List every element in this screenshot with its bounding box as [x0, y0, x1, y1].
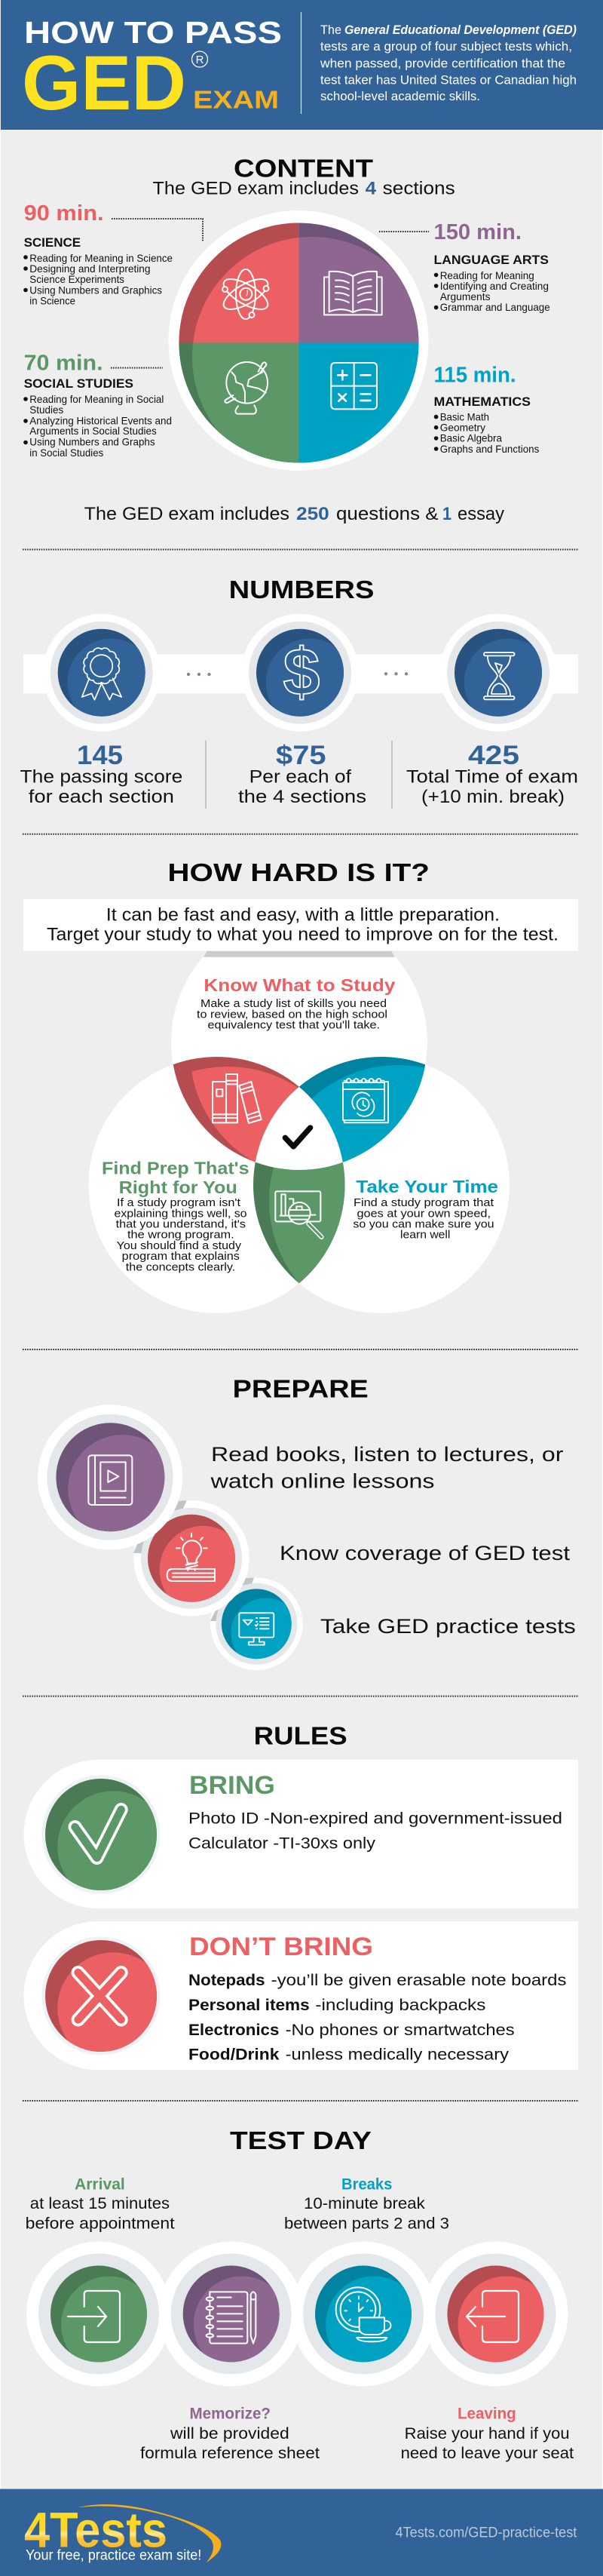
- panel: language arts: Grammar and Language: [440, 301, 550, 313]
- title: GED: [22, 40, 186, 126]
- panel: social studies: Using Numbers and Graphs: [29, 435, 155, 447]
- panel: mathematics: Graphs and Functions: [440, 443, 539, 455]
- text: find prep: explaining things well, so: [115, 1207, 247, 1220]
- stat: fee per section: $75: [276, 741, 326, 770]
- step: practice tests icon: [210, 1578, 303, 1670]
- heading: how hard is it: HOW HARD IS IT?: [167, 858, 430, 886]
- heading: content: CONTENT: [234, 154, 373, 183]
- panel: don't bring: -you’ll be given erasable note boards: [271, 1972, 567, 1989]
- text: find prep: If a study program isn't: [117, 1196, 241, 1209]
- icon: check mark: [285, 1128, 311, 1147]
- icon: chart with magnifier: [275, 1191, 322, 1237]
- text: take your time: goes at your own speed,: [357, 1207, 491, 1220]
- text: coverage: Know coverage of GED test: [280, 1542, 571, 1564]
- step: read books icon: [38, 1405, 182, 1549]
- panel: don't bring: -unless medically necessary: [286, 2046, 510, 2064]
- panel: bring: [23, 1760, 578, 1908]
- logo: 4Tests: Your free, practice exam site!: [26, 2547, 201, 2563]
- icon: dollar sign: [249, 622, 354, 726]
- text: find prep: that you understand, it's: [116, 1218, 246, 1231]
- stat: passing score: [20, 741, 182, 807]
- text: questions and essay: questions &: [336, 504, 439, 524]
- panel: don't bring: [23, 1921, 578, 2070]
- text: arrival: at least 15 minutes: [30, 2195, 170, 2212]
- panel: social studies: Analyzing Historical Events and: [29, 414, 172, 426]
- icon: open book: [324, 272, 382, 315]
- panel: language arts: 150 min.: [434, 220, 522, 244]
- text: memorize: Memorize?: [190, 2405, 271, 2423]
- subheading: 4 sections: The GED exam includes: [152, 178, 359, 199]
- text: memorize: formula reference sheet: [140, 2445, 320, 2462]
- icon: exit door: [435, 2254, 556, 2375]
- text: arrival: [26, 2175, 175, 2233]
- panel: bring: Photo ID -Non-expired and government-issued: [188, 1810, 562, 1827]
- stat: passing score: 145: [77, 741, 123, 770]
- stat: total time: (+10 min. break): [421, 787, 565, 807]
- icon: books: [213, 1074, 262, 1123]
- panel: science: Designing and Interpreting: [29, 263, 150, 275]
- panel: social studies: Reading for Meaning in Social: [29, 393, 164, 405]
- panel: social studies: 70 min.: [24, 352, 103, 376]
- logo: 4Tests: 4Tests: [24, 2501, 167, 2557]
- teal overlap: [286, 1057, 425, 1162]
- text: questions and essay: The GED exam includes: [84, 504, 289, 524]
- title: EXAM: [193, 86, 279, 113]
- panel: science: 90 min.: [24, 201, 104, 226]
- intro paragraph: The: [320, 23, 341, 37]
- panel: science: Science Experiments: [29, 273, 124, 285]
- text: arrival: Arrival: [75, 2175, 125, 2193]
- icon: calendar clock: [343, 1079, 388, 1122]
- venn diagram: [89, 956, 510, 1313]
- text: questions and essay: essay: [458, 504, 504, 524]
- red overlap: [173, 1057, 299, 1162]
- text: read books: watch online lessons: [210, 1470, 434, 1493]
- callout: intro band: It can be fast and easy, with a little preparation.: [106, 905, 500, 925]
- text: memorize: [140, 2405, 320, 2462]
- text: leaving: Raise your hand if you: [405, 2425, 570, 2442]
- text: leaving: need to leave your seat: [401, 2445, 574, 2462]
- subheading: 4 sections: sections: [383, 178, 455, 199]
- panel: science: SCIENCE: [24, 235, 81, 250]
- text: find prep: the wrong program.: [127, 1228, 234, 1242]
- panel: mathematics: 115 min.: [434, 364, 516, 388]
- panel: mathematics: Geometry: [440, 421, 485, 433]
- stat: fee per section: [238, 741, 366, 807]
- panel: language arts: [379, 220, 550, 313]
- panel: don't bring: Food/Drink: [188, 2046, 280, 2064]
- text: know what to study: to review, based on the high school: [197, 1008, 387, 1021]
- panel: language arts: Identifying and Creating: [440, 280, 549, 292]
- panel: don't bring: Electronics: [188, 2022, 279, 2039]
- panel: mathematics: Basic Algebra: [440, 431, 502, 444]
- pie chart: four sections: [169, 210, 428, 471]
- test day icons row: [26, 2242, 568, 2387]
- stat: fee per section: the 4 sections: [238, 787, 366, 807]
- panel: science: Reading for Meaning in Science: [29, 252, 173, 264]
- panel: language arts: Reading for Meaning: [440, 269, 534, 281]
- icon: award ribbon: [51, 622, 155, 726]
- title: HOW TO PASS: [24, 15, 282, 50]
- text: breaks: 10-minute break: [304, 2195, 425, 2212]
- text: read books: Read books, listen to lectures, or: [211, 1443, 563, 1466]
- panel: don't bring: Notepads: [188, 1972, 265, 1989]
- panel: don't bring: Personal items: [188, 1997, 310, 2014]
- title: R: [196, 54, 204, 66]
- callout: intro band: [23, 899, 578, 957]
- panel: social studies: Arguments in Social Studies: [29, 425, 157, 437]
- intro paragraph: General Educational Development (GED): [344, 23, 577, 37]
- icon: x mark: [41, 1936, 169, 2064]
- intro paragraph: school-level academic skills.: [320, 89, 480, 103]
- panel: social studies: Studies: [29, 404, 63, 416]
- text: leaving: Leaving: [458, 2405, 516, 2423]
- icon: atom: [219, 269, 272, 319]
- panel: social studies: [23, 352, 172, 459]
- panel: mathematics: Basic Math: [440, 410, 489, 422]
- header banner: [1, 0, 603, 130]
- text: find prep: program that explains: [122, 1250, 240, 1263]
- panel: bring: Calculator -TI-30xs only: [188, 1835, 376, 1853]
- text: find prep: You should find a study: [117, 1239, 242, 1252]
- icon: dollar sign: $: [283, 634, 320, 709]
- intro paragraph: when passed, provide certification that the: [320, 56, 565, 71]
- icon: notebook and pencil: [171, 2254, 292, 2375]
- text: memorize: will be provided: [170, 2425, 289, 2442]
- text: leaving: [401, 2405, 574, 2462]
- text: breaks: between parts 2 and 3: [284, 2215, 449, 2233]
- text: find prep: Find Prep That's: [102, 1159, 249, 1178]
- text: questions and essay: [84, 504, 504, 524]
- text: arrival: before appointment: [26, 2215, 175, 2233]
- green overlap: [253, 1103, 345, 1284]
- panel: science: Using Numbers and Graphics: [29, 284, 162, 296]
- stat: total time: [406, 741, 578, 807]
- icon: clock and coffee: [303, 2254, 424, 2375]
- heading: rules: RULES: [254, 1721, 347, 1750]
- panel: don't bring: -No phones or smartwatches: [286, 2022, 515, 2039]
- stat: total time: 425: [468, 741, 519, 770]
- text: take your time: Find a study program that: [354, 1196, 494, 1209]
- panel: language arts: LANGUAGE ARTS: [434, 253, 549, 267]
- stat: passing score: for each section: [29, 787, 174, 807]
- footer banner: [0, 2489, 603, 2576]
- panel: bring: BRING: [189, 1771, 275, 1800]
- icon: calculator: [331, 363, 377, 409]
- panel: science: in Science: [29, 294, 75, 306]
- panel: mathematics: [434, 364, 539, 455]
- text: know what to study: Make a study list of skills you need: [200, 997, 387, 1010]
- text: breaks: Breaks: [341, 2175, 392, 2193]
- text: breaks: [284, 2175, 449, 2233]
- text: know what to study: Know What to Study: [204, 975, 396, 995]
- panel: don't bring: -including backpacks: [315, 1997, 485, 2014]
- step: coverage icon: [133, 1500, 249, 1616]
- icon: hourglass: [447, 622, 552, 726]
- text: questions and essay: 1: [442, 504, 451, 524]
- subheading: 4 sections: 4: [366, 178, 377, 199]
- stat: total time: Total Time of exam: [406, 767, 578, 788]
- callout: intro band: Target your study to what you need to improve on for the test.: [47, 924, 559, 944]
- text: find prep: [102, 1159, 249, 1273]
- panel: science: [23, 201, 203, 306]
- text: know what to study: [197, 975, 396, 1031]
- text: find prep: the concepts clearly.: [126, 1260, 235, 1273]
- stat: fee per section: Per each of: [249, 767, 351, 788]
- heading: prepare: PREPARE: [233, 1375, 369, 1403]
- text: practice tests: Take GED practice tests: [320, 1615, 576, 1638]
- text: take your time: Take Your Time: [356, 1177, 498, 1196]
- intro paragraph: [320, 23, 577, 103]
- subheading: 4 sections: [152, 178, 455, 199]
- heading: test day: TEST DAY: [230, 2126, 372, 2154]
- title: [22, 15, 282, 126]
- intro paragraph: tests are a group of four subject tests which,: [320, 39, 572, 54]
- panel: social studies: in Social Studies: [29, 447, 103, 459]
- text: read books: [210, 1443, 563, 1493]
- text: website url: 4Tests.com/GED-practice-test: [395, 2525, 577, 2541]
- stat: passing score: The passing score: [20, 767, 182, 788]
- icon: enter door: [38, 2254, 159, 2375]
- text: take your time: [353, 1177, 498, 1242]
- text: take your time: learn well: [400, 1228, 450, 1242]
- text: take your time: so you can make sure you: [353, 1218, 494, 1231]
- text: know what to study: equivalency test that you'll take.: [208, 1018, 380, 1031]
- text: find prep: Right for You: [119, 1177, 237, 1197]
- panel: language arts: Arguments: [440, 290, 490, 302]
- panel: social studies: SOCIAL STUDIES: [24, 376, 133, 391]
- intro paragraph: test taker has United States or Canadian high: [320, 72, 577, 88]
- panel: don't bring: DON’T BRING: [189, 1933, 373, 1961]
- panel: number icons band: [23, 614, 578, 732]
- text: questions and essay: 250: [296, 504, 329, 524]
- panel: mathematics: MATHEMATICS: [434, 395, 531, 409]
- icon: check: [41, 1775, 169, 1902]
- icon: globe: [225, 362, 268, 414]
- heading: numbers: NUMBERS: [229, 576, 374, 603]
